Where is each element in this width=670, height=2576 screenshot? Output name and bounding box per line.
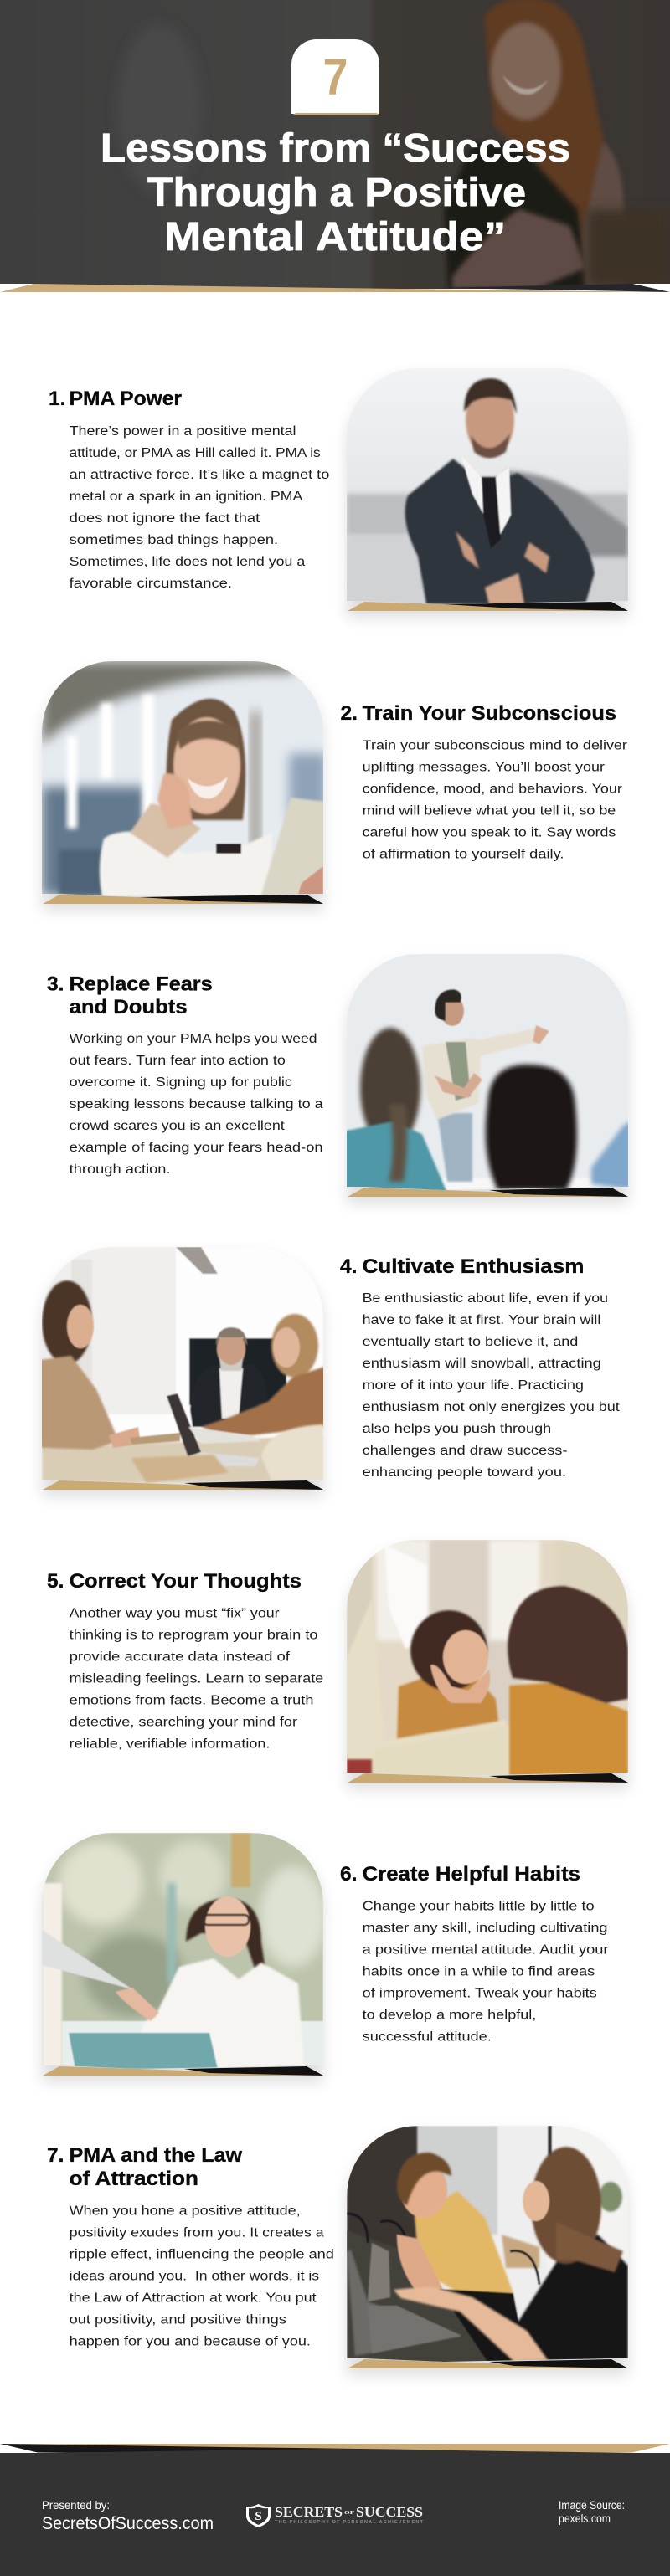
lesson 3 heading: 3. [47, 972, 64, 996]
number badge: 7 [323, 49, 348, 105]
title: Mental Attitude” [164, 215, 506, 259]
lesson 2 body text: uplifting messages. You’ll boost your [363, 760, 605, 775]
lesson 1 heading: 1. [49, 387, 65, 410]
lesson 2 body text: Train your subconscious mind to deliver [363, 738, 627, 753]
image source credit [559, 2499, 625, 2525]
lesson 6 body text: of improvement. Tweak your habits [363, 1987, 597, 2000]
presented by credit [42, 2499, 214, 2533]
lesson 4 body text: enthusiasm not only energizes you but [363, 1400, 621, 1414]
lesson 5 heading: 5. [47, 1570, 64, 1593]
title [100, 126, 570, 259]
lesson 6 body text: a positive mental attitude. Audit your [363, 1943, 609, 1957]
lesson 3 heading: and Doubts [70, 996, 188, 1019]
lesson 1 body text [70, 424, 329, 591]
lesson 3 body text [70, 1032, 323, 1177]
lesson 4: Cultivate Enthusiasm [39, 1247, 621, 1496]
lesson 1 body text: does not ignore the fact that [70, 511, 260, 526]
logo: Secrets of Success [246, 2504, 424, 2527]
lesson 7 body text: ideas around you. In other words, it is [70, 2270, 319, 2283]
lesson 2: Train Your Subconscious [42, 661, 627, 911]
footer [0, 2444, 670, 2576]
lesson 2 body text: confidence, mood, and behaviors. Your [363, 782, 622, 797]
lesson 7 heading: PMA and the Law [70, 2144, 243, 2167]
header banner [0, 0, 670, 292]
footer gold and black ribbon [0, 2444, 670, 2453]
lesson 2 heading: 2. [340, 702, 358, 725]
lesson 6 photo: woman handing over paper [42, 1833, 327, 2082]
lesson 1: PMA Power [49, 368, 628, 618]
icon: shield: S [255, 2510, 262, 2523]
lesson 4 heading: 4. [340, 1255, 357, 1278]
gold and black base [43, 1480, 323, 1490]
lesson 7 body text: out positivity, and positive things [70, 2313, 286, 2327]
lesson 2 body text: mind will believe what you tell it, so be [363, 803, 616, 818]
lesson 4 body text: more of it into your life. Practicing [363, 1378, 584, 1393]
lesson 3 body text: Working on your PMA helps you weed [70, 1032, 317, 1046]
lesson 4 body text: also helps you push through [363, 1422, 551, 1436]
lesson 1 heading: PMA Power [70, 387, 182, 410]
gold and black base [348, 602, 628, 611]
lesson 1 body text: There’s power in a positive mental [70, 424, 296, 439]
presented by credit: Presented by: [42, 2499, 110, 2512]
lesson 1 body text: favorable circumstance. [70, 577, 232, 591]
lesson 4 body text: enthusiasm will snowball, attracting [363, 1357, 601, 1371]
lesson 3 body text: through action. [70, 1162, 171, 1177]
lesson 3 heading: Replace Fears [70, 972, 213, 996]
lesson 5 heading: Correct Your Thoughts [70, 1570, 302, 1593]
image source credit: pexels.com [559, 2512, 611, 2525]
number badge [291, 39, 379, 115]
lesson 3 body text: speaking lessons because talking to a [70, 1097, 323, 1111]
lesson 7 body text: positivity exudes from you. It creates a [70, 2226, 324, 2240]
logo: Secrets of Success: SUCCESS [356, 2504, 423, 2520]
lesson 5 body text: provide accurate data instead of [70, 1650, 291, 1664]
lesson 1 body text: metal or a spark in an ignition. PMA [70, 490, 303, 504]
lesson 2 body text [363, 738, 627, 862]
lesson 6 body text: to develop a more helpful, [363, 2009, 536, 2022]
lesson 3 body text: overcome it. Signing up for public [70, 1075, 292, 1090]
lesson 6 body text: Change your habits little by little to [363, 1900, 595, 1913]
lesson 5 body text: misleading feelings. Learn to separate [70, 1672, 323, 1686]
lesson 4 body text: eventually start to believe it, and [363, 1335, 578, 1349]
gold and black base [348, 2359, 628, 2368]
lesson 2 body text: careful how you speak to it. Say words [363, 825, 616, 840]
lesson 7 body text: the Law of Attraction at work. You put [70, 2291, 317, 2305]
lesson 1 photo: businessman [347, 368, 628, 618]
lesson 5 body text: detective, searching your mind for [70, 1716, 297, 1729]
lesson 3 heading [47, 972, 213, 1019]
gold and black base [348, 1188, 628, 1197]
logo tagline: THE PHILOSOPHY OF PERSONAL ACHIEVEMENT [275, 2520, 424, 2525]
lesson 1 body text: attitude, or PMA as Hill called it. PMA is [70, 446, 321, 460]
lesson 2 photo: woman on phone [42, 661, 327, 911]
lesson 7 heading [47, 2144, 243, 2190]
lesson 5 body text: emotions from facts. Become a truth [70, 1694, 313, 1707]
lesson 5 body text: Another way you must “fix” your [70, 1607, 280, 1620]
lesson 2 body text: of affirmation to yourself daily. [363, 847, 564, 862]
lesson 4 body text: enhancing people toward you. [363, 1465, 566, 1480]
lesson 7 heading: 7. [47, 2144, 64, 2167]
title: Lessons from “Success [100, 126, 570, 171]
lesson 5: Correct Your Thoughts [47, 1540, 628, 1789]
lesson 7 body text: happen for you and because of you. [70, 2335, 311, 2348]
lesson 3: Replace Fears and Doubts [47, 954, 631, 1203]
lesson 1 body text: sometimes bad things happen. [70, 533, 278, 547]
lesson 2 heading: Train Your Subconscious [363, 702, 616, 725]
lesson 4 body text [363, 1291, 621, 1480]
lesson 3 body text: example of facing your fears head-on [70, 1141, 323, 1155]
lesson 7: PMA and the Law of Attraction [47, 2126, 628, 2375]
lesson 4 body text: Be enthusiastic about life, even if you [363, 1291, 608, 1306]
icon: shield [246, 2504, 271, 2527]
lesson 1 body text: an attractive force. It’s like a magnet to [70, 468, 329, 482]
lesson 7 heading: of Attraction [70, 2168, 198, 2190]
presented by credit: SecretsOfSuccess.com [42, 2514, 214, 2533]
logo: Secrets of Success: OF [344, 2511, 354, 2516]
lesson 5 body text: reliable, verifiable information. [70, 1737, 270, 1751]
gold and black base [348, 1773, 628, 1783]
lesson 3 body text: crowd scares you is an excellent [70, 1119, 286, 1133]
lesson 3 body text: out fears. Turn fear into action to [70, 1054, 286, 1068]
lesson 6 body text: habits once in a while to find areas [363, 1965, 595, 1978]
lesson 5 body text: thinking is to reprogram your brain to [70, 1629, 318, 1642]
lesson 7 photo: two women at a laptop [347, 2126, 628, 2375]
lesson 4 heading: Cultivate Enthusiasm [363, 1255, 584, 1278]
footer background [0, 2453, 670, 2576]
lesson 3 photo: man presenting to audience [343, 954, 631, 1203]
lesson 7 body text [70, 2204, 334, 2348]
lesson 1 body text: Sometimes, life does not lend you a [70, 555, 306, 569]
header photo: smiling woman under dark overlay [0, 0, 670, 289]
gold and black base [43, 2066, 323, 2076]
lesson 4 photo: office meeting [39, 1247, 327, 1496]
gold and black base [43, 895, 323, 904]
lesson 7 body text: ripple effect, influencing the people and [70, 2248, 334, 2261]
header gold and black ribbon [0, 284, 670, 292]
logo wordmark: SECRETS [275, 2504, 343, 2520]
lesson 4 body text: challenges and draw success- [363, 1444, 568, 1458]
lesson 6 body text: successful attitude. [363, 2030, 492, 2044]
lesson 6 body text [363, 1900, 609, 2044]
lesson 6 heading: 6. [340, 1863, 357, 1886]
lesson 5 body text [70, 1607, 323, 1751]
lesson 4 body text: have to fake it at first. Your brain will [363, 1313, 600, 1327]
image source credit: Image Source: [559, 2499, 625, 2512]
lesson 6 body text: master any skill, including cultivating [363, 1922, 608, 1935]
lesson 7 body text: When you hone a positive attitude, [70, 2204, 301, 2218]
lesson 6: Create Helpful Habits [42, 1833, 609, 2082]
title: Through a Positive [147, 171, 526, 215]
lesson 5 photo: woman smiling at mirror [347, 1540, 628, 1789]
lesson 6 heading: Create Helpful Habits [363, 1863, 580, 1886]
